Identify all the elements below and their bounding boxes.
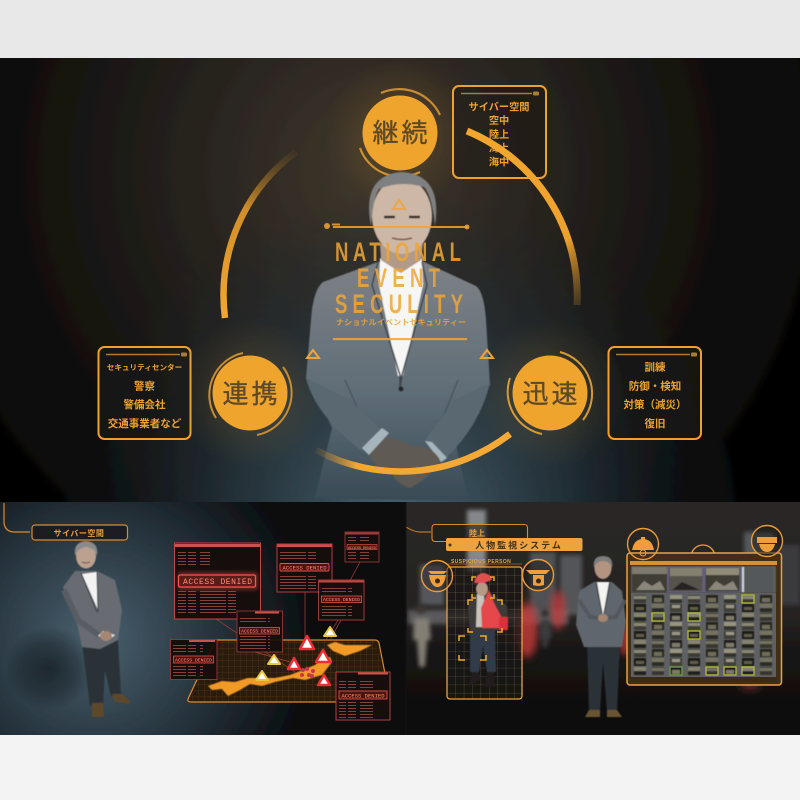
panel: main stage: [0, 58, 800, 502]
window: access denied middle: [237, 611, 282, 652]
circle: 迅速: 迅速: [522, 374, 581, 411]
camera feeds grid: [631, 593, 776, 677]
circle: 迅速: [508, 352, 592, 434]
circle: 継続: 継続: [372, 113, 431, 150]
box: partners: 警察: [134, 380, 155, 392]
presenter: right: [576, 556, 626, 717]
box: domains: 陸上: [489, 128, 509, 141]
label: 陸上: [406, 524, 528, 542]
tracking brackets: [459, 577, 502, 660]
panel: cyber space: [0, 502, 406, 735]
box: response: [608, 347, 701, 439]
box: domains: 海中: [489, 156, 509, 168]
connector lines: [216, 562, 360, 672]
box: response: 訓練: [644, 360, 666, 374]
title: national event security: [324, 223, 470, 340]
red silhouettes: [516, 590, 760, 688]
map of Japan: [208, 642, 372, 696]
title: national event security: NATIONAL: [335, 237, 461, 267]
window: access denied right: ACCESS DENIED: [323, 597, 360, 603]
camera feeds top row: [631, 566, 776, 593]
window: access denied left: ACCESS DENIED: [175, 658, 212, 664]
left ring arc: [224, 152, 296, 318]
background bystanders: [413, 604, 552, 667]
hotspot dots: [300, 667, 315, 678]
label: サイバー空間: サイバー空間: [54, 528, 104, 538]
presenter: main: [306, 172, 490, 501]
city backdrop: [408, 510, 800, 624]
window: access denied top right: [345, 532, 379, 562]
window: access denied top: [277, 544, 332, 592]
camera icon monitor right: [752, 526, 782, 556]
window: access denied top right: ACCESS DENIED: [348, 547, 377, 551]
camera icon left: [422, 560, 452, 592]
triangle markers: [307, 200, 493, 358]
box: domains: サイバー空間: [469, 100, 529, 114]
monitor wall: [627, 545, 782, 685]
box: partners: 交通事業者など: [108, 417, 182, 430]
title: national event security: ナショナルイベントセキュリティー: [336, 318, 466, 327]
box: domains: 海上: [489, 142, 509, 154]
box: domains: [453, 86, 546, 178]
warning triangles red: [288, 636, 330, 685]
scanned person: [468, 573, 508, 687]
warning triangles yellow: [256, 627, 336, 680]
scan frame: [447, 567, 522, 699]
window: access denied right: [318, 580, 364, 620]
map floor: [188, 640, 390, 702]
presenter: cyber: [63, 541, 130, 717]
window: access denied large: [174, 543, 260, 619]
label: 陸上: 陸上: [469, 528, 485, 538]
bottom ring arc: [316, 434, 510, 471]
window: access denied middle: ACCESS DENIED: [241, 628, 278, 634]
window: access denied lower right: ACCESS DENIED: [342, 692, 385, 700]
circle: 連携: [209, 353, 292, 435]
camera icon right: [522, 560, 554, 590]
panel divider: [405, 502, 406, 735]
box: response: 復旧: [644, 417, 666, 430]
glow: circles: [175, 58, 625, 468]
highlighted feeds: [652, 595, 754, 675]
title bar: person monitoring: 人物監視システム: [475, 540, 563, 550]
box: domains: 空中: [489, 114, 509, 127]
window: access denied left: [170, 640, 217, 680]
window: access denied lower right: [336, 672, 390, 720]
title: national event security: SECULITY: [335, 289, 463, 319]
panel: land surveillance: [406, 502, 800, 735]
title: national event security: EVENT: [357, 263, 440, 293]
box: partners: セキュリティセンター: [107, 362, 182, 372]
box: partners: 警備会社: [124, 398, 166, 411]
box: response: 防御・検知: [629, 380, 681, 392]
box: partners: [98, 347, 190, 439]
right ring arc: [467, 131, 577, 305]
camera icon monitor left: [628, 528, 658, 560]
circle: 連携: 連携: [222, 374, 281, 411]
label: サイバー空間: [4, 503, 128, 540]
box: response: 対策（減災）: [624, 398, 686, 411]
window: access denied top: ACCESS DENIED: [282, 564, 327, 572]
window: access denied large: ACCESS DENIED: [183, 578, 252, 587]
circle: 継続: [360, 89, 440, 177]
suspicious person label: SUSPICIOUS PERSON: [451, 559, 511, 565]
title bar: person monitoring: [446, 538, 582, 551]
